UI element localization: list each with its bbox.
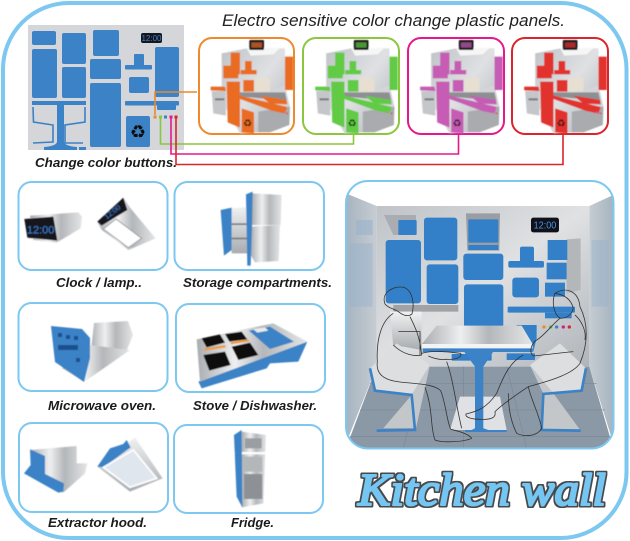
panel: extractor hood	[19, 423, 168, 512]
caption: change color buttons: Change color buttons.	[35, 156, 177, 170]
clock	[531, 218, 559, 232]
left bench	[370, 312, 430, 431]
panel: kitchen wall scene	[346, 181, 614, 449]
title: Kitchen wall: Kitchen wall	[357, 464, 606, 515]
panel: red kitchen	[512, 38, 608, 134]
clock: 12:00	[534, 221, 557, 232]
panel: clock and lamp	[18, 182, 168, 270]
panel: clock and lamp: 12:00	[27, 224, 54, 236]
color buttons	[542, 325, 571, 329]
panel: flat wall layout with change color buttons	[28, 25, 184, 150]
caption: stove: Stove / Dishwasher.	[193, 399, 317, 413]
caption: clock lamp: Clock / lamp..	[56, 276, 142, 290]
panel: magenta kitchen	[408, 38, 504, 134]
panel: stove and dishwasher	[176, 304, 325, 392]
caption: storage: Storage compartments.	[183, 276, 332, 290]
icon: recycle: ♻	[130, 122, 146, 142]
clock: 12:00	[141, 34, 162, 43]
panel: fridge	[174, 425, 323, 513]
panel: green kitchen	[303, 38, 399, 134]
people outlines	[377, 287, 586, 442]
caption: fridge: Fridge.	[231, 516, 274, 530]
caption: microwave: Microwave oven.	[48, 399, 156, 413]
panel: storage compartments	[174, 182, 324, 270]
wall panels	[384, 213, 581, 361]
panel: microwave oven	[18, 303, 168, 391]
floor slab under table	[450, 397, 507, 430]
change color buttons	[154, 116, 178, 118]
connector lines from buttons to panels	[155, 92, 563, 164]
heading: Electro sensitive color change plastic panels.	[222, 11, 565, 30]
table	[422, 326, 533, 432]
right bench	[530, 343, 586, 431]
panel: clock and lamp: 12:00	[102, 203, 122, 221]
panel: orange kitchen	[199, 38, 294, 134]
caption: extractor: Extractor hood.	[48, 516, 147, 530]
